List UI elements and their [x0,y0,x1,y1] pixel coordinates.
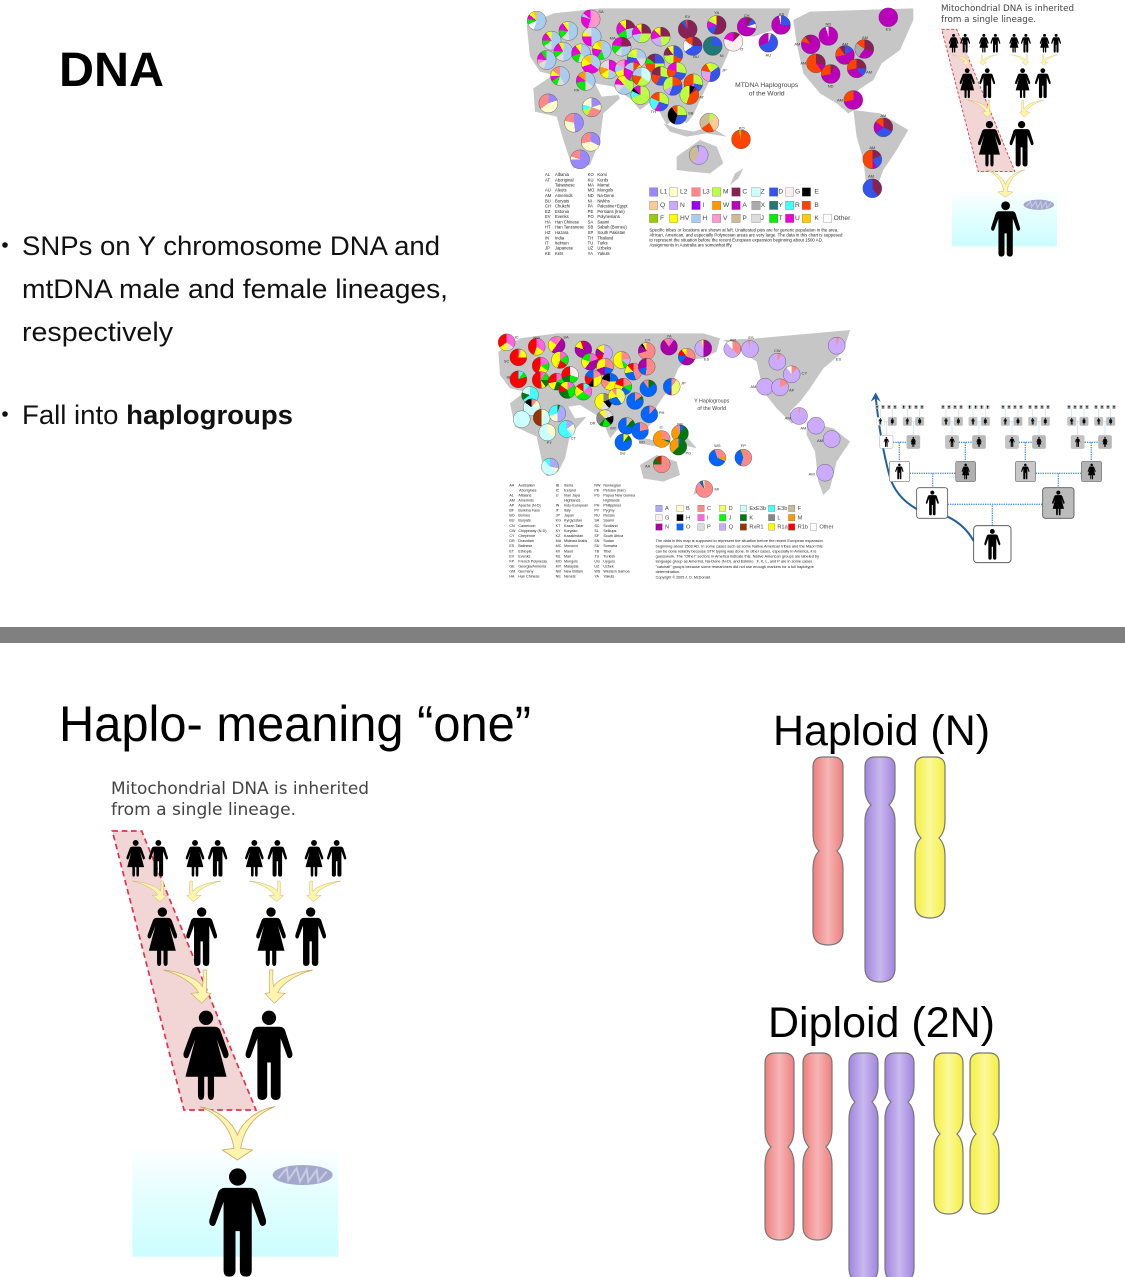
pie population labels: AM [837,98,843,102]
pie population labels: SA [563,335,569,340]
haplogroup colour legend: R1b [798,524,808,530]
haplogroup colour legend [656,505,834,530]
pie population labels: WS [714,443,721,448]
pie population labels: PY [547,440,552,445]
haploid chromosomes [813,757,945,982]
haplogroup colour legend: N [680,201,685,209]
pie population labels: NW [533,335,540,340]
bullet list: SNPs and haplogroups: Fall into haplogroups [22,400,293,430]
population key, second column: IB IC IJ IN IT JP KG KT KY KZ MA MC MI ML MO MY NB NE [556,483,562,579]
haplogroup colour legend: Q [660,201,665,209]
pie population labels: ND [828,84,834,88]
pie population labels: AM [809,472,815,476]
pie population labels: AM [800,61,806,66]
haplogroup colour legend: C [707,505,711,511]
pie population labels: CW [774,348,781,353]
haplogroup colour legend: A [742,201,747,209]
haplogroup colour legend: HV [680,214,689,222]
haplogroup colour legend [649,188,850,223]
bullet list: SNPs and haplogroups: SNPs on Y chromosome DNA and [22,231,440,261]
population key: AA AL AM AP BF BO BU CN CW CY DR ES ET EV FP GE GM HA [509,483,515,579]
pie population labels: CY [802,371,807,376]
large inheritance diagram: mitochondrial DNA: from a single lineage. [111,800,296,820]
pie population labels: AM [880,113,886,118]
haplogroup colour legend: Y [778,201,783,209]
Y-chromosome family tree diagram [871,392,1116,563]
bullet list: SNPs and haplogroups: respectively [22,317,174,347]
pie population labels: BO [639,440,645,445]
haplogroup colour legend: Q [729,524,733,530]
haplogroup colour legend: E3b [777,505,787,511]
haplogroup colour legend: U [795,214,800,222]
haplogroup colour legend: I [702,201,704,209]
population key names, second column: Komi Kurds Marrat Mongols Na-Dene Nivkhs Palestine+Egypt Persians (Iran) Polynesians Saami Sabah (Borneo) South Pakistan Thailand Turks Uzbeks Yakuts [597,172,628,256]
haplogroup colour legend: W [723,201,729,209]
haplogroup colour legend: B [686,505,690,511]
haplogroup colour legend: ExE3b [749,505,766,511]
map title: MTDNA Haplogroups of the World [735,81,798,97]
haplogroup colour legend: C [742,188,747,195]
haplogroup colour legend: V [723,214,727,222]
haplogroup colour legend: M [798,514,802,521]
pie population labels: MA [610,36,616,41]
haplogroup colour legend: J [729,514,731,521]
haplogroup colour legend: H [702,214,707,222]
pie population labels: CT [571,436,576,441]
pie population labels: KS [779,12,784,16]
haplogroup colour legend: Other [819,524,834,530]
haplogroup colour legend: J [761,214,764,222]
pie population labels: AM [866,70,872,75]
haplogroup colour legend: E [814,188,819,195]
bullet list: SNPs and haplogroups [2,231,448,430]
pie population labels: YA [666,334,672,338]
pie population labels: PA [574,88,579,92]
diploid chromosomes [765,1053,999,1277]
haplogroup colour legend: P [742,214,747,222]
haplogroup colour legend: L [777,514,780,521]
haplogroup colour legend: L3 [702,188,710,195]
haplogroup colour legend: A [665,505,669,511]
haplogroup colour legend: RxR1 [749,524,764,530]
population key names: Australian Aborigines Altaians Amerinds Apache (N-D) Burkina Faso Borneo Buryats Cameroon Chippeway (N-D) Cheyenne Dravidian Balinese Ethiopia Evenks French Polynesia Georgia/Armenia Germany Han Chinese [518,483,547,579]
large inheritance diagram: mitochondrial DNA: Mitochondrial DNA is inherited [111,779,369,799]
pie population labels: BU [693,54,699,59]
pie population labels: AM [785,416,791,421]
pie charts: Y haplogroups by population [498,334,846,498]
heading: Diploid (2N): Diploid (2N) [768,999,995,1047]
pie population labels: AM [869,145,875,150]
haplogroup colour legend: N [665,524,669,530]
pie population labels: IB [506,375,510,380]
divider bar [0,627,1125,643]
pie population labels: PG [685,451,691,456]
world landmass [498,330,850,495]
pie population labels: PO [739,126,745,131]
pie population labels: FP [741,443,746,448]
bullet list: SNPs and haplogroups: mtDNA male and female lineages, [22,274,448,304]
haplogroup colour legend: I [707,514,709,521]
pie population labels: AM [794,42,800,47]
haplogroup colour legend: O [686,524,690,530]
pie population labels: JP [681,381,686,386]
population key, third column: NW PE PG PH PY RU SA SC SL SF SN SU TB TU UG UZ WS YA [594,483,600,579]
population key: AL AT AU AM BU CH EZ EV HA HT HZ IN IT JP KE [545,172,551,256]
pie population labels: AM [730,338,736,342]
small inheritance diagram: mitochondrial DNA: from a single lineage. [941,15,1036,25]
haplogroup colour legend: L2 [680,188,687,195]
population key names, second column: Iberia Iceland Irian Jaya Highlands Indo-European Italy Japan Kyrgyzstan Kazan Tatar Koryako Kazakhstan Mideast Arabs Morocco Maori Mali Mongols Malaysia New Britain Nenets [564,483,588,579]
pie population labels: AU [766,53,771,57]
pie population labels: IT [740,47,743,51]
pie population labels: AM [862,35,868,40]
pie population labels: AT [699,95,704,100]
title: DNA: DNA [59,43,164,97]
pie population labels: DR [590,421,596,426]
haplogroup colour legend: H [686,514,690,521]
pie population labels: AA [645,464,650,468]
map title: Y Haplogroups of the World [694,398,729,411]
pie population labels: IJ [659,425,663,430]
population key names: Albania Aboriginal Taiwanese Aleuts Amerinds Buryats Chukchi Estonia Evenks Han Chinese Han Tanzanese Hazara India Itelmen Japanese Kets [555,172,584,256]
haplogroup colour legend: D [778,188,783,195]
haplogroup colour legend: P [707,524,711,530]
pie population labels: YA [714,10,719,15]
pie population labels: AM [868,174,874,178]
pie population labels: CY [645,338,650,342]
haplogroup colour legend: G [795,188,800,195]
pie population labels: AM [750,384,756,389]
pie population labels: CH [744,13,750,18]
pie population labels: EV [685,14,690,19]
pie population labels: ND [825,22,831,27]
pie population labels: AM [817,438,823,443]
map: Y haplogroups of the world [498,330,850,580]
pie population labels: ES [704,357,709,362]
pie population labels: SB [688,111,693,116]
pie population labels: AM [800,426,806,431]
population key names, third column: Norwegian Persian (Iran) Papua New Guinea Highlands Philippines Pygmy Russia Saami Scotland Selkups South Africa Sudan Sumatra Tibet Turkish Uygurs Uzbek Western Samoa Yakuts [603,483,635,579]
haplogroup colour legend: X [761,201,765,209]
pie population labels: TH [651,109,656,114]
heading: Haploid (N): Haploid (N) [773,707,990,755]
haplogroup colour legend: R [795,201,800,209]
pie population labels: SA [598,9,604,14]
pie population labels: ES [886,27,891,32]
pie population labels: MY [610,426,616,431]
pie population labels: ES [836,357,841,362]
world landmass [526,8,914,185]
haplogroup colour legend: M [723,188,729,195]
pie population labels: AM [842,42,848,46]
pie population labels: PH [659,410,664,415]
population key, second column: KO KU MA MO ND NI PA PE PO SA SB SP TH TU UZ YA [588,172,594,256]
haplogroup colour legend: D [729,505,733,511]
haplogroup colour legend: Other [834,214,850,222]
small inheritance diagram: mitochondrial DNA [941,4,1074,257]
map: mtDNA haplogroups of the world [526,8,914,256]
large inheritance diagram: mitochondrial DNA [111,779,369,1277]
map note: Specific tribes or locations are shown at left. Unattested pies are for generic population in the area. African, American, and especially Polynesian areas are very large. The data in this chart is supposed to represent the situation before the recent European expansion beginning about 1500 AD. Assignments in Australia are somewhat iffy. [649,228,842,247]
pie population labels: ES [748,335,754,340]
haplogroup colour legend: L1 [660,188,667,195]
haplogroup colour legend: K [814,214,819,222]
haplogroup colour legend: Z [761,188,765,195]
heading: Haplo- meaning one: Haplo- meaning “one” [59,696,531,752]
haplogroup colour legend: G [665,514,669,521]
small inheritance diagram: mitochondrial DNA: Mitochondrial DNA is inherited [941,4,1074,14]
pie population labels [574,9,891,178]
pie population labels: SC [504,359,509,363]
haplogroup colour legend: F [660,214,664,222]
pie population labels: NI [720,53,724,58]
pie population labels: IC [515,335,519,340]
map note: The data in this map is supposed to represent the situation before the recent European expansion beginning about 1500 AD. In some cases such as some Native American tribes and the Maori this can be done reliably because STR typing was done. In other cases, especially in America, it is guesswork. The "Other" sectors in America indicate this. Native American groups are labeled by language group as Amerind, Na-Dene (N-D), and Eskimo. F, K, L, and P are in some cases "catchall" groups because some researchers did not use enough markers for a full haplotype determination. [656,539,823,574]
haplogroup colour legend: B [814,201,819,209]
pie charts: mtDNA by population [526,8,898,198]
copyright line: Copyright © 2005 J. D. McDonald [656,575,710,579]
haplogroup colour legend: K [749,514,753,521]
pie population labels: MI [714,487,719,491]
pie population labels: AP [789,388,794,392]
haplogroup colour legend: T [778,214,782,222]
pie population labels: NB [677,422,683,426]
pie population labels: SU [620,451,625,456]
haplogroup colour legend: R1a [777,524,788,530]
pie population labels [504,334,841,491]
haplogroup colour legend: F [798,505,801,511]
pie population labels: JP [722,68,727,72]
